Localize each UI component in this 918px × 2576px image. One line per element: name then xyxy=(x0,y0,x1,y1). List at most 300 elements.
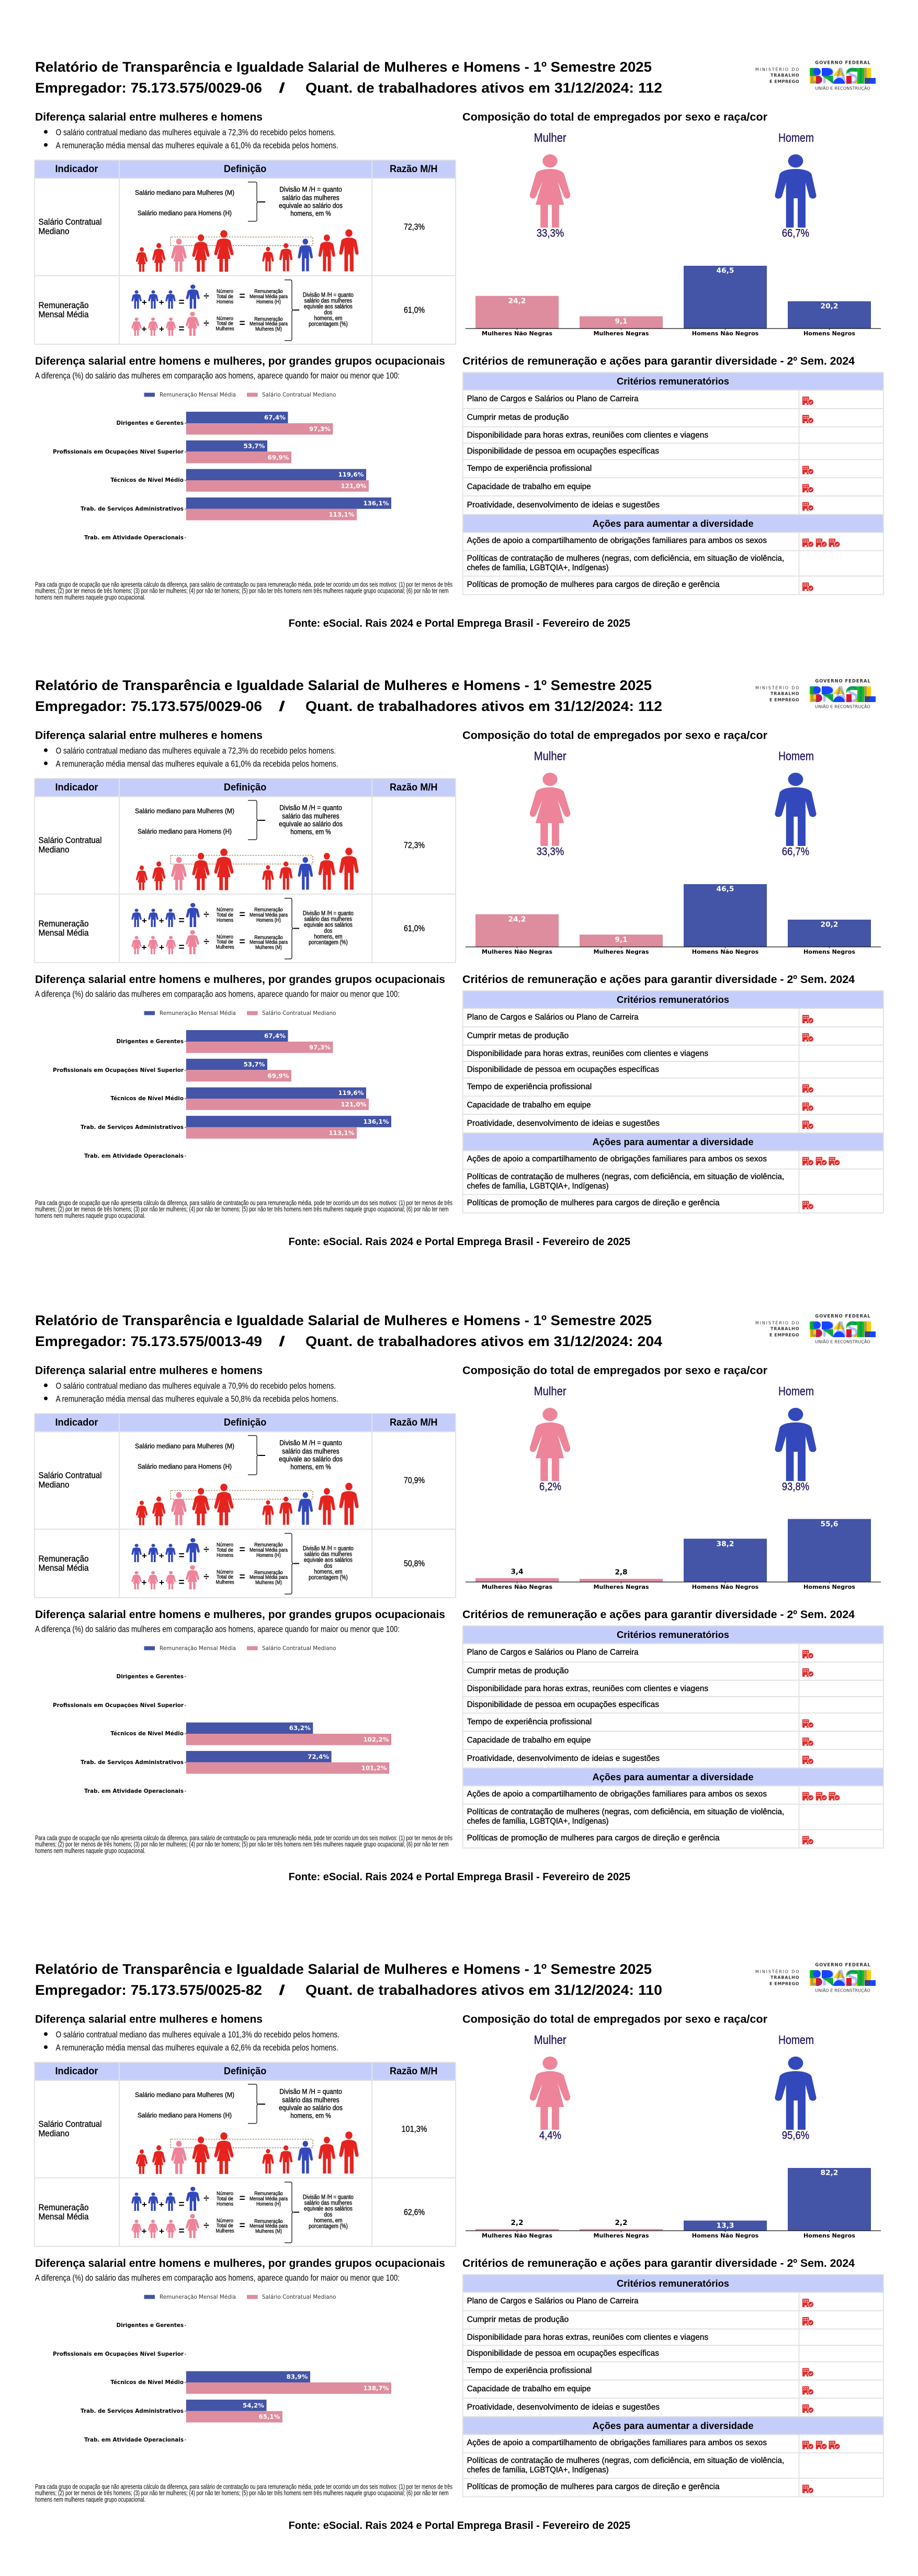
indicator table: Remuneração xyxy=(39,919,89,929)
horizontal bar chart: 69,9% xyxy=(268,454,289,461)
title: Relatório de Transparência e Igualdade Salarial de Mulheres e Homens - 1º Semestre 2025 xyxy=(35,59,652,75)
horizontal bar chart: Profissionais em Ocupações Nível Superior xyxy=(53,1067,184,1074)
definition: remuneração média: + xyxy=(142,916,147,926)
definition: remuneração média: Número xyxy=(217,1542,233,1548)
panel: critérios e ações xyxy=(462,355,883,594)
legend: Salário Contratual Mediano xyxy=(262,391,336,398)
footnote xyxy=(35,1199,452,1219)
icon: mulher: 6,2% xyxy=(539,1481,561,1493)
criteria table: Critérios remuneratórios xyxy=(617,2278,729,2289)
indicator table: Mensal Média xyxy=(39,310,89,319)
bar chart xyxy=(466,2168,881,2239)
definition: remuneração média: Mensal Média para xyxy=(250,2196,288,2202)
definition: remuneração média: Total de xyxy=(217,321,233,327)
horizontal bar chart: Trab. de Serviços Administrativos xyxy=(81,1759,184,1766)
definition: remuneração média: Mensal Média para xyxy=(250,939,288,945)
bullet list: O salário contratual mediano das mulheres equivale a 72,3% do recebido pelos homens. xyxy=(56,746,336,755)
definition: salário mediano: Salário mediano para Mulheres (M) xyxy=(135,807,234,815)
horizontal bar chart: Dirigentes e Gerentes xyxy=(116,420,184,426)
criteria table: Proatividade, desenvolvimento de ideias e sugestões xyxy=(467,501,660,510)
panel: critérios e ações xyxy=(462,2257,883,2496)
definition: remuneração média: Remuneração xyxy=(254,1569,283,1576)
definition: remuneração média: = xyxy=(239,318,245,329)
legend: Remuneração Mensal Média xyxy=(160,1645,236,1652)
horizontal bar chart: Técnicos de Nível Médio xyxy=(110,1731,184,1737)
indicator table: Mensal Média xyxy=(39,2212,89,2221)
heading: Composição do total de empregados por sexo e raça/cor xyxy=(462,2013,768,2026)
logo: ministério e governo federal: UNIÃO E RECONSTRUÇÃO xyxy=(815,86,870,91)
definition: remuneração média: Número xyxy=(217,2218,233,2224)
title: Quant. de trabalhadores ativos em 31/12/2024: 112 xyxy=(305,80,662,96)
indicator table: Remuneração xyxy=(39,300,89,310)
source line: Fonte: eSocial. Rais 2024 e Portal Emprega Brasil - Fevereiro de 2025 xyxy=(289,618,630,629)
source line: Fonte: eSocial. Rais 2024 e Portal Emprega Brasil - Fevereiro de 2025 xyxy=(289,1236,630,1248)
definition: remuneração média: = xyxy=(178,1577,185,1588)
subtitle: A diferença (%) do salário das mulheres em comparação aos homens, aparece quando for maior ou menor que 100: xyxy=(35,990,400,999)
criteria table: Plano de Cargos e Salários ou Plano de Carreira xyxy=(467,394,639,403)
criteria table: Capacidade de trabalho em equipe xyxy=(467,482,591,491)
definition: remuneração média: Mulheres xyxy=(216,1579,234,1586)
legend xyxy=(144,391,336,398)
definition: remuneração média: + xyxy=(142,1578,147,1587)
criteria table: Capacidade de trabalho em equipe xyxy=(467,1736,591,1745)
definition: remuneração média: ÷ xyxy=(203,2193,209,2204)
criteria table: chefes de família, LGBTQIA+, Indígenas) xyxy=(467,1182,609,1191)
definition: remuneração média: Total de xyxy=(217,293,233,300)
bullet list: A remuneração média mensal das mulheres equivale a 62,6% da recebida pelos homens. xyxy=(56,2043,338,2052)
definition: remuneração média: ÷ xyxy=(203,318,209,329)
bar chart: Homens Não Negros xyxy=(692,1584,759,1590)
icon: mulher: Mulher xyxy=(534,1384,566,1398)
bar chart: Mulheres Não Negras xyxy=(482,948,552,955)
criteria table: Critérios remuneratórios xyxy=(617,995,729,1005)
definition: remuneração média: Remuneração xyxy=(254,907,283,913)
definition: remuneração média: + xyxy=(142,297,147,308)
criteria table: Políticas de promoção de mulheres para cargos de direção e gerência xyxy=(467,1199,720,1207)
definition: remuneração média: Homens (H) xyxy=(256,1552,281,1558)
definition: remuneração média: + xyxy=(142,324,147,334)
definition: remuneração média: Remuneração xyxy=(254,288,283,295)
legend: Remuneração Mensal Média xyxy=(160,391,236,398)
horizontal bar chart: Trab. em Atividade Operacionais xyxy=(84,535,184,541)
definition: remuneração média: Remuneração xyxy=(254,2190,283,2197)
criteria table: Disponibilidade para horas extras, reuniões com clientes e viagens xyxy=(467,1049,708,1058)
horizontal bar chart: Trab. em Atividade Operacionais xyxy=(84,1788,184,1794)
title: Empregador: 75.173.575/0013-49 xyxy=(35,1334,262,1349)
definition: remuneração média: = xyxy=(239,1544,245,1555)
definition: salário mediano: Salário mediano para Homens (H) xyxy=(138,209,232,217)
legend: Salário Contratual Mediano xyxy=(262,2293,336,2300)
definition: remuneração média: + xyxy=(159,297,164,308)
title: Relatório de Transparência e Igualdade Salarial de Mulheres e Homens - 1º Semestre 2025 xyxy=(35,677,652,693)
definition: remuneração média: Mulheres (M) xyxy=(255,1579,282,1586)
horizontal bar chart: 101,2% xyxy=(361,1765,387,1772)
bar chart: Homens Não Negros xyxy=(692,330,759,337)
legend: Salário Contratual Mediano xyxy=(262,1010,336,1016)
definition: salário mediano: homens, em % xyxy=(290,1463,331,1471)
definition: remuneração média: Total de xyxy=(217,1574,233,1580)
definition: remuneração média: Mulheres xyxy=(216,2228,234,2234)
subtitle: A diferença (%) do salário das mulheres em comparação aos homens, aparece quando for maior ou menor que 100: xyxy=(35,2274,400,2283)
bar chart: 2,2 xyxy=(511,2219,523,2227)
criteria table: Disponibilidade de pessoa em ocupações específicas xyxy=(467,2349,659,2358)
indicator table: Remuneração xyxy=(39,1554,89,1564)
logo: ministério e governo federal xyxy=(755,1314,876,1345)
horizontal bar chart: 54,2% xyxy=(243,2402,264,2409)
icon: mulher: 4,4% xyxy=(539,2129,561,2142)
criteria table: Disponibilidade para horas extras, reuniões com clientes e viagens xyxy=(467,1684,708,1693)
indicator table xyxy=(35,160,456,344)
report 1 xyxy=(35,59,883,629)
logo: ministério e governo federal: UNIÃO E RECONSTRUÇÃO xyxy=(815,1988,870,1993)
logo: ministério e governo federal: TRABALHO xyxy=(770,1327,799,1331)
definition: remuneração média: Número xyxy=(217,2190,233,2197)
horizontal bar chart: 53,7% xyxy=(244,1061,265,1068)
definition: remuneração média: Mulheres (M) xyxy=(255,944,282,951)
panel: diferença por grupos ocupacionais xyxy=(35,1608,452,1855)
title: Relatório de Transparência e Igualdade Salarial de Mulheres e Homens - 1º Semestre 2025 xyxy=(35,1961,652,1977)
definition: remuneração média: ÷ xyxy=(203,936,209,947)
indicator table: Mediano xyxy=(39,226,69,236)
heading: Diferença salarial entre homens e mulheres, por grandes grupos ocupacionais xyxy=(35,973,445,986)
criteria table: Cumprir metas de produção xyxy=(467,1031,569,1040)
definition: salário mediano: salário das mulheres xyxy=(282,812,339,820)
definition: remuneração média: salário das mulheres xyxy=(304,2200,352,2207)
definition: remuneração média: equivale aos salários xyxy=(304,2206,353,2212)
icon: homem: Homem xyxy=(778,131,814,144)
bullet list xyxy=(44,128,338,150)
logo: ministério e governo federal: TRABALHO xyxy=(770,1975,799,1980)
indicator table: Definição xyxy=(224,1417,266,1428)
footnote: mulheres; (2) por ter menos de três homens; (3) por não ter mulheres; (4) por não ter homens; (5) por não ter três homens nem três mulheres naquele grupo ocupacional; (6) por não ter nem xyxy=(35,1840,449,1848)
criteria table: Políticas de contratação de mulheres (negras, com deficiência, em situação de violência, xyxy=(467,2456,784,2465)
indicator table: 50,8% xyxy=(404,1558,425,1568)
report 2 xyxy=(35,677,883,1248)
criteria table xyxy=(463,991,883,1213)
definition: remuneração média: = xyxy=(239,936,245,947)
definition: remuneração média: Divisão M /H = quanto xyxy=(303,292,354,299)
indicator table: 101,3% xyxy=(402,2124,427,2134)
indicator table: 61,0% xyxy=(404,305,425,315)
indicator table: Remuneração xyxy=(39,2202,89,2212)
indicator table: Razão M/H xyxy=(390,1417,437,1428)
definition: remuneração média: homens, em xyxy=(314,1569,342,1575)
criteria table: Tempo de experiência profissional xyxy=(467,464,592,473)
indicator table: 61,0% xyxy=(404,923,425,933)
horizontal bar chart: 136,1% xyxy=(363,1118,389,1125)
indicator table: 62,6% xyxy=(404,2207,425,2217)
bullet list xyxy=(44,1381,338,1404)
criteria table: Critérios remuneratórios xyxy=(617,376,729,387)
criteria table: Disponibilidade para horas extras, reuniões com clientes e viagens xyxy=(467,431,708,439)
bar chart: 55,6 xyxy=(820,1520,838,1529)
report 3 xyxy=(35,1313,883,1883)
horizontal bar chart: 113,1% xyxy=(328,1129,355,1137)
definition: salário mediano: Divisão M /H = quanto xyxy=(279,185,342,194)
criteria table: Cumprir metas de produção xyxy=(467,413,569,422)
criteria table: Ações para aumentar a diversidade xyxy=(592,2421,753,2431)
bullet list: A remuneração média mensal das mulheres equivale a 61,0% da recebida pelos homens. xyxy=(56,759,338,769)
legend xyxy=(144,1645,336,1652)
definition: remuneração média: + xyxy=(159,2199,164,2210)
definition: remuneração média: Mensal Média para xyxy=(250,1547,288,1553)
horizontal bar chart: 97,3% xyxy=(309,425,331,433)
definition: remuneração média: dos xyxy=(324,1563,332,1569)
panel: composição xyxy=(462,1364,881,1590)
definition: remuneração média xyxy=(131,280,354,341)
horizontal bar chart: Trab. de Serviços Administrativos xyxy=(81,1124,184,1131)
subtitle: A diferença (%) do salário das mulheres em comparação aos homens, aparece quando for maior ou menor que 100: xyxy=(35,1625,400,1634)
footnote: mulheres; (2) por ter menos de três homens; (3) por não ter mulheres; (4) por não ter homens; (5) por não ter três homens nem três mulheres naquele grupo ocupacional; (6) por não ter nem xyxy=(35,1205,449,1213)
bar chart: 38,2 xyxy=(717,1540,734,1549)
heading: Diferença salarial entre mulheres e homens xyxy=(35,1364,263,1377)
panel: diferença salarial xyxy=(35,729,456,963)
definition: salário mediano: equivale ao salário dos xyxy=(279,1455,343,1463)
horizontal bar chart: Trab. em Atividade Operacionais xyxy=(84,1153,184,1159)
title: / xyxy=(279,80,286,96)
definition: remuneração média xyxy=(131,898,354,959)
definition: remuneração média: Mensal Média para xyxy=(250,321,288,327)
definition: remuneração média: Homens xyxy=(217,299,233,305)
bullet list: A remuneração média mensal das mulheres equivale a 50,8% da recebida pelos homens. xyxy=(56,1394,338,1404)
definition: remuneração média: Homens xyxy=(217,2201,233,2207)
bar chart: 82,2 xyxy=(820,2169,838,2177)
panel: diferença salarial xyxy=(35,1364,456,1598)
definition: remuneração média: Total de xyxy=(217,2196,233,2202)
icon: homem: 66,7% xyxy=(782,227,809,240)
definition: remuneração média: Homens xyxy=(217,1552,233,1558)
definition: remuneração média: Mensal Média para xyxy=(250,912,288,918)
title: Empregador: 75.173.575/0029-06 xyxy=(35,698,262,714)
horizontal bar chart: 113,1% xyxy=(328,511,355,518)
logo: ministério e governo federal: MINISTÉRIO DO xyxy=(755,66,799,72)
icon: mulher xyxy=(530,1384,570,1493)
definition: remuneração média: dos xyxy=(324,310,332,316)
logo: ministério e governo federal xyxy=(755,679,876,709)
criteria table: Ações para aumentar a diversidade xyxy=(592,518,753,529)
bullet list xyxy=(44,746,338,769)
indicator table: Indicador xyxy=(55,2066,98,2077)
criteria table: Políticas de promoção de mulheres para cargos de direção e gerência xyxy=(467,580,720,589)
report 4 xyxy=(35,1961,883,2532)
heading: Diferença salarial entre homens e mulheres, por grandes grupos ocupacionais xyxy=(35,355,445,367)
definition: remuneração média: = xyxy=(178,2199,185,2210)
definition: remuneração média: dos xyxy=(324,928,332,934)
bar chart: 9,1 xyxy=(615,318,628,325)
bullet list: O salário contratual mediano das mulheres equivale a 101,3% do recebido pelos homens. xyxy=(56,2030,339,2039)
definition: remuneração média: + xyxy=(159,1578,164,1587)
definition: remuneração média: Número xyxy=(217,315,233,322)
heading: Diferença salarial entre mulheres e homens xyxy=(35,111,263,123)
definition: remuneração média: + xyxy=(142,1551,147,1561)
definition: remuneração média: + xyxy=(142,943,147,952)
horizontal bar chart: 121,0% xyxy=(341,482,367,490)
definition: remuneração média: = xyxy=(178,297,185,308)
logo: ministério e governo federal xyxy=(755,61,876,91)
definition: salário mediano: Divisão M /H = quanto xyxy=(279,2087,342,2096)
horizontal bar chart xyxy=(53,2322,391,2443)
definition: remuneração média: Mulheres (M) xyxy=(255,326,282,332)
definition: remuneração média: Mensal Média para xyxy=(250,293,288,300)
criteria table xyxy=(463,2275,883,2496)
footnote: homens nem mulheres naquele grupo ocupacional. xyxy=(35,1212,145,1219)
bar chart: Homens Não Negros xyxy=(692,948,759,955)
panel: diferença salarial xyxy=(35,111,456,344)
definition: salário mediano: salário das mulheres xyxy=(282,2096,339,2104)
logo: ministério e governo federal: MINISTÉRIO DO xyxy=(755,1968,799,1974)
icon: homem xyxy=(775,131,817,240)
logo: ministério e governo federal: TRABALHO xyxy=(770,692,799,696)
definition: salário mediano: Salário mediano para Homens (H) xyxy=(138,2111,232,2119)
heading: Critérios de remuneração e ações para garantir diversidade - 2º Sem. 2024 xyxy=(462,355,855,367)
title: Quant. de trabalhadores ativos em 31/12/2024: 204 xyxy=(305,1334,662,1349)
definition: remuneração média: ÷ xyxy=(203,2220,209,2231)
footnote: Para cada grupo de ocupação que não apresenta cálculo da diferença, para salário de contratação ou para remuneração média, pode ter ocorrido um dos seis motivos: (1) por ter menos de três xyxy=(35,581,452,588)
title: Empregador: 75.173.575/0025-82 xyxy=(35,1982,262,1998)
definition: remuneração média: Divisão M /H = quanto xyxy=(303,2195,354,2201)
definition: salário mediano: Salário mediano para Mulheres (M) xyxy=(135,2091,234,2099)
bar chart: 24,2 xyxy=(508,916,526,924)
definition: remuneração média: Total de xyxy=(217,2223,233,2229)
horizontal bar chart: 53,7% xyxy=(244,443,265,450)
definition: salário mediano: Salário mediano para Mulheres (M) xyxy=(135,188,234,197)
bar chart: 46,5 xyxy=(717,885,734,894)
legend: Remuneração Mensal Média xyxy=(160,1010,236,1016)
definition: remuneração média: porcentagem (%) xyxy=(309,940,348,946)
criteria table: Disponibilidade para horas extras, reuniões com clientes e viagens xyxy=(467,2333,708,2342)
criteria table: Ações de apoio a compartilhamento de obrigações familiares para ambos os sexos xyxy=(467,536,767,545)
definition: remuneração média: equivale aos salários xyxy=(304,304,353,310)
definition: remuneração média: ÷ xyxy=(203,291,209,302)
logo: ministério e governo federal: GOVERNO FEDERAL xyxy=(815,61,870,66)
horizontal bar chart: Trab. em Atividade Operacionais xyxy=(84,2437,184,2443)
definition: remuneração média: + xyxy=(159,916,164,926)
footnote: homens nem mulheres naquele grupo ocupacional. xyxy=(35,2496,145,2503)
panel: composição xyxy=(462,2013,881,2239)
criteria table: Proatividade, desenvolvimento de ideias e sugestões xyxy=(467,2403,660,2412)
icon: homem: Homem xyxy=(778,749,814,763)
definition: remuneração média: + xyxy=(142,2199,147,2210)
indicator table: Razão M/H xyxy=(390,164,437,175)
criteria table: chefes de família, LGBTQIA+, Indígenas) xyxy=(467,2466,609,2475)
indicator table: Indicador xyxy=(55,1417,98,1428)
definition: remuneração média: + xyxy=(159,1551,164,1561)
definition: remuneração média: Número xyxy=(217,907,233,913)
definition: salário mediano: Divisão M /H = quanto xyxy=(279,804,342,812)
heading: Critérios de remuneração e ações para garantir diversidade - 2º Sem. 2024 xyxy=(462,973,855,986)
criteria table: Ações de apoio a compartilhamento de obrigações familiares para ambos os sexos xyxy=(467,1155,767,1163)
definition: remuneração média: + xyxy=(159,324,164,334)
definition: remuneração média: ÷ xyxy=(203,1572,209,1583)
definition: salário mediano xyxy=(135,800,359,890)
bar chart xyxy=(466,884,881,955)
logo: ministério e governo federal: BRASIL xyxy=(810,1965,874,1991)
horizontal bar chart: Técnicos de Nível Médio xyxy=(110,477,184,483)
definition: remuneração média: Mulheres xyxy=(216,944,234,951)
horizontal bar chart: Dirigentes e Gerentes xyxy=(116,1038,184,1045)
heading: Diferença salarial entre mulheres e homens xyxy=(35,729,263,742)
definition: remuneração média: salário das mulheres xyxy=(304,917,352,923)
definition: remuneração média: Número xyxy=(217,288,233,295)
title xyxy=(35,59,662,96)
indicator table: 70,9% xyxy=(404,1475,425,1485)
criteria table: Tempo de experiência profissional xyxy=(467,2366,592,2375)
criteria table: chefes de família, LGBTQIA+, Indígenas) xyxy=(467,563,609,572)
definition: remuneração média: Remuneração xyxy=(254,1542,283,1548)
icon: homem xyxy=(775,749,817,858)
definition: salário mediano: Salário mediano para Homens (H) xyxy=(138,1462,232,1470)
definition: remuneração média: Total de xyxy=(217,912,233,918)
criteria table: Políticas de contratação de mulheres (negras, com deficiência, em situação de violência, xyxy=(467,1807,784,1816)
icon: mulher: Mulher xyxy=(534,131,566,144)
horizontal bar chart: 67,4% xyxy=(264,414,286,421)
bar chart: Mulheres Negras xyxy=(593,2232,649,2239)
panel: diferença salarial xyxy=(35,2013,456,2246)
criteria table: Plano de Cargos e Salários ou Plano de Carreira xyxy=(467,1013,639,1022)
heading: Diferença salarial entre homens e mulheres, por grandes grupos ocupacionais xyxy=(35,2257,445,2269)
indicator table xyxy=(35,1414,456,1598)
definition: remuneração média: Divisão M /H = quanto xyxy=(303,1546,354,1552)
criteria table: Tempo de experiência profissional xyxy=(467,1082,592,1091)
definition: remuneração média: = xyxy=(239,1572,245,1583)
criteria table: Plano de Cargos e Salários ou Plano de Carreira xyxy=(467,2297,639,2306)
logo: ministério e governo federal: E EMPREGO xyxy=(769,80,799,84)
subtitle: A diferença (%) do salário das mulheres em comparação aos homens, aparece quando for maior ou menor que 100: xyxy=(35,371,400,381)
indicator table xyxy=(35,2062,456,2246)
definition: salário mediano: equivale ao salário dos xyxy=(279,820,343,828)
criteria table: Disponibilidade de pessoa em ocupações específicas xyxy=(467,447,659,456)
criteria table: Ações para aumentar a diversidade xyxy=(592,1137,753,1147)
panel: critérios e ações xyxy=(462,973,883,1213)
indicator table: Mensal Média xyxy=(39,928,89,937)
bar chart: Mulheres Negras xyxy=(593,1584,649,1590)
source line: Fonte: eSocial. Rais 2024 e Portal Emprega Brasil - Fevereiro de 2025 xyxy=(289,2520,630,2532)
bar chart: Mulheres Negras xyxy=(593,330,649,337)
horizontal bar chart: Trab. de Serviços Administrativos xyxy=(81,506,184,512)
bar chart: 20,2 xyxy=(820,921,838,929)
definition: salário mediano: salário das mulheres xyxy=(282,1447,339,1455)
bar chart: Homens Negros xyxy=(803,2232,855,2239)
definition: remuneração média: = xyxy=(178,916,185,926)
horizontal bar chart: 119,6% xyxy=(338,471,364,478)
definition: remuneração média: Homens xyxy=(217,917,233,923)
criteria table: chefes de família, LGBTQIA+, Indígenas) xyxy=(467,1817,609,1826)
bar chart: 20,2 xyxy=(820,302,838,311)
footnote: Para cada grupo de ocupação que não apresenta cálculo da diferença, para salário de contratação ou para remuneração média, pode ter ocorrido um dos seis motivos: (1) por ter menos de três xyxy=(35,1834,452,1841)
horizontal bar chart: Trab. de Serviços Administrativos xyxy=(81,2408,184,2414)
title: / xyxy=(279,1334,286,1349)
logo: ministério e governo federal: UNIÃO E RECONSTRUÇÃO xyxy=(815,1339,870,1345)
icon: mulher: 33,3% xyxy=(537,227,564,240)
bullet list: O salário contratual mediano das mulheres equivale a 70,9% do recebido pelos homens. xyxy=(56,1381,336,1391)
bullet list: A remuneração média mensal das mulheres equivale a 61,0% da recebida pelos homens. xyxy=(56,141,338,150)
definition: salário mediano: equivale ao salário dos xyxy=(279,2104,343,2111)
definition: remuneração média: homens, em xyxy=(314,2218,342,2224)
definition: remuneração média: Total de xyxy=(217,1547,233,1553)
bar chart: 3,4 xyxy=(511,1568,523,1576)
horizontal bar chart: Dirigentes e Gerentes xyxy=(116,1674,184,1680)
criteria table: Ações de apoio a compartilhamento de obrigações familiares para ambos os sexos xyxy=(467,1790,767,1799)
definition: remuneração média: = xyxy=(178,323,185,335)
criteria table: Ações de apoio a compartilhamento de obrigações familiares para ambos os sexos xyxy=(467,2438,767,2447)
definition: remuneração média: homens, em xyxy=(314,315,342,322)
panel: composição xyxy=(462,729,881,955)
logo: ministério e governo federal: BRASIL xyxy=(810,1317,874,1342)
logo: ministério e governo federal: E EMPREGO xyxy=(769,1333,799,1337)
definition: remuneração média: Homens (H) xyxy=(256,299,281,305)
indicator table: Definição xyxy=(224,164,266,175)
bar chart: 2,2 xyxy=(615,2219,628,2227)
